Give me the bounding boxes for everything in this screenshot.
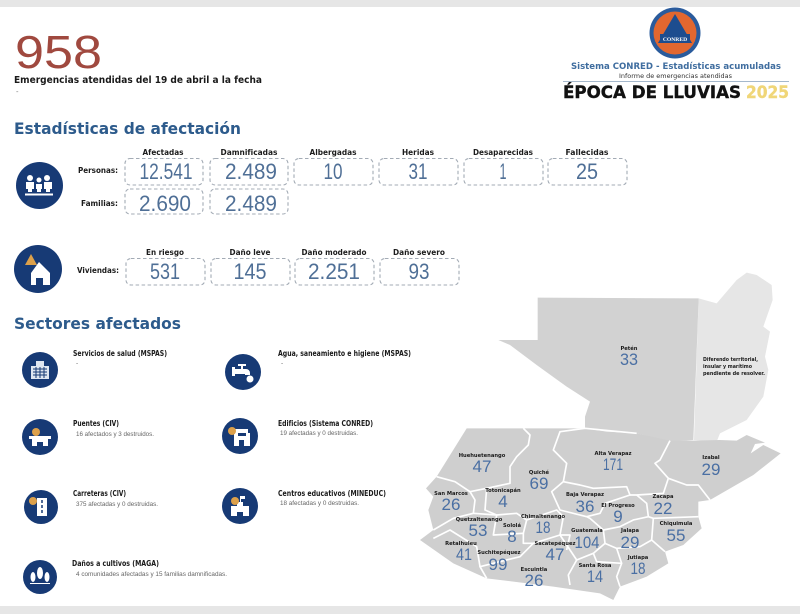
icon: hospital xyxy=(22,352,58,388)
sector: Agua: Agua, saneamiento e higiene (MSPAS) xyxy=(278,349,411,358)
stat: Damnificadas: 2.489 xyxy=(225,159,277,184)
icon: CONRED seal: CONRED xyxy=(663,37,687,43)
department: Alta Verapaz xyxy=(594,451,632,474)
department: Santa Rosa: 14 xyxy=(587,567,603,586)
department: Baja Verapaz: 36 xyxy=(576,497,594,516)
department: Alta Verapaz: Alta Verapaz xyxy=(594,451,632,457)
heading: Estadísticas de afectación: Estadísticas de afectación xyxy=(14,119,241,138)
stat: Albergadas: 10 xyxy=(324,159,342,184)
department: San Marcos: 26 xyxy=(442,495,460,514)
stat: Daño moderado xyxy=(295,248,374,285)
stat: Familias damnificadas: 2.489 xyxy=(225,191,277,216)
icon: crops xyxy=(23,560,57,594)
department: Guatemala: Guatemala xyxy=(571,528,603,534)
icon: building xyxy=(222,418,258,454)
department: Quiché: 69 xyxy=(530,474,548,493)
stat: Heridas: 31 xyxy=(408,159,428,184)
heading: Sectores afectados: Sectores afectados xyxy=(14,314,181,333)
stat: Desaparecidas: Desaparecidas xyxy=(473,148,533,157)
department: Retalhuleu: Retalhuleu xyxy=(445,541,477,547)
stat: Familias afectadas xyxy=(125,189,203,216)
sector: Centros educativos: 18 afectadas y 0 destruidas. xyxy=(280,500,359,507)
department: Jutiapa xyxy=(627,555,649,578)
department: Zacapa: Zacapa xyxy=(652,494,674,500)
department: Petén: 33 xyxy=(620,350,638,369)
department: Sacatepéquez: 47 xyxy=(546,545,564,564)
stat: Fallecidas: Fallecidas xyxy=(566,148,609,157)
department: Escuintla: Escuintla xyxy=(521,567,548,573)
note: Diferendo territorial xyxy=(703,357,765,377)
stat: Albergadas: Albergadas xyxy=(310,148,357,157)
icon: CONRED seal xyxy=(650,8,700,58)
stat: Daño severo xyxy=(380,248,459,285)
department: Suchitepéquez: Suchitepéquez xyxy=(477,549,521,556)
headline number: 958 xyxy=(15,26,102,78)
department: Alta Verapaz: 171 xyxy=(603,455,623,474)
department: El Progreso: El Progreso xyxy=(601,503,635,509)
sector: Agua: - xyxy=(281,360,283,367)
logo block xyxy=(563,8,789,103)
sector: Puentes xyxy=(22,419,154,455)
sector: Puentes: 16 afectados y 3 destruidos. xyxy=(76,431,154,438)
department: El Progreso: 9 xyxy=(613,507,623,526)
department: Guatemala xyxy=(571,528,603,552)
map region: Petén and Belize xyxy=(498,273,773,442)
report subtitle: Informe de emergencias atendidas xyxy=(619,73,732,80)
map region: southern departments xyxy=(420,428,781,600)
stat: En riesgo xyxy=(126,248,205,285)
department: Sacatepéquez xyxy=(534,540,576,564)
note: Diferendo territorial: pendiente de resolver. xyxy=(703,371,765,377)
department: Escuintla xyxy=(521,567,548,590)
stat: Afectadas: Afectadas xyxy=(142,148,184,157)
department: Jalapa: 29 xyxy=(621,533,639,552)
sector: Agua xyxy=(225,349,411,390)
department: Retalhuleu: 41 xyxy=(456,545,472,564)
icon: bridge xyxy=(22,419,58,455)
icon: faucet xyxy=(225,354,261,390)
sector: Daños a cultivos: Daños a cultivos (MAGA) xyxy=(72,559,159,568)
department: San Marcos: San Marcos xyxy=(434,491,468,497)
department: Quetzaltenango: Quetzaltenango xyxy=(456,517,503,523)
stat: Daño moderado: Daño moderado xyxy=(302,248,367,257)
department: Quetzaltenango xyxy=(456,517,503,540)
stat: Afectadas xyxy=(125,148,203,185)
department: Totonicapán: 4 xyxy=(498,492,508,511)
department: Santa Rosa: Santa Rosa xyxy=(579,563,612,569)
department: Sololá xyxy=(503,522,521,546)
department: Retalhuleu xyxy=(445,541,477,564)
department: Zacapa xyxy=(652,494,674,518)
department: Chimaltenango xyxy=(521,514,565,537)
department: Suchitepéquez xyxy=(477,549,521,574)
system title: Sistema CONRED - Estadísticas acumuladas xyxy=(571,62,781,72)
season year: 2025 xyxy=(746,83,789,103)
icon: school xyxy=(222,488,258,524)
note: Diferendo territorial: Diferendo territorial, xyxy=(703,357,758,363)
row label: Viviendas: Viviendas: xyxy=(77,266,119,275)
stat: Daño leve: 145 xyxy=(234,259,266,284)
stat: Heridas: Heridas xyxy=(402,148,434,157)
stat: Daño leve xyxy=(211,248,290,285)
row label: Familias: Familias: xyxy=(81,199,118,208)
icon: people xyxy=(16,162,63,209)
stat: En riesgo: En riesgo xyxy=(146,248,184,257)
map of Guatemala xyxy=(420,273,781,600)
sector: Servicios de salud xyxy=(22,349,167,388)
stat: Daño moderado: 2.251 xyxy=(308,259,360,284)
department: Escuintla: 26 xyxy=(525,571,543,590)
sector: Puentes: Puentes (CIV) xyxy=(73,419,119,428)
stat: Heridas xyxy=(379,148,458,185)
department: Huehuetenango: 47 xyxy=(473,457,491,476)
sector: Carreteras: Carreteras (CIV) xyxy=(73,489,126,498)
department: Sacatepéquez: Sacatepéquez xyxy=(534,540,576,547)
sector: Centros educativos xyxy=(222,488,386,524)
stat: Fallecidas xyxy=(548,148,627,185)
icon: house warning xyxy=(14,245,62,293)
department: Jutiapa: 18 xyxy=(630,559,646,578)
department: Sololá: Sololá xyxy=(503,522,521,529)
department: Chiquimula xyxy=(660,521,693,545)
sector: Servicios de salud: Servicios de salud (MSPAS) xyxy=(73,349,167,358)
stat: Afectadas: 12.541 xyxy=(140,159,192,184)
stat: Desaparecidas xyxy=(464,148,543,185)
department: Quiché: Quiché xyxy=(529,469,550,476)
sector: Daños a cultivos xyxy=(23,559,227,594)
sector: Edificios xyxy=(222,418,373,454)
season title: ÉPOCA DE LLUVIAS xyxy=(563,81,741,103)
stat: En riesgo: 531 xyxy=(150,259,180,284)
department: Chimaltenango: Chimaltenango xyxy=(521,514,565,520)
department: El Progreso xyxy=(601,503,635,526)
department: Totonicapán: Totonicapán xyxy=(485,487,521,494)
department: Totonicapán xyxy=(485,487,521,511)
department: Chiquimula: Chiquimula xyxy=(660,521,693,527)
sector: Centros educativos: Centros educativos (MINEDUC) xyxy=(278,489,386,498)
stat: Damnificadas xyxy=(210,148,288,185)
row label: Personas: Personas: xyxy=(78,166,118,175)
department: Chiquimula: 55 xyxy=(667,526,685,545)
note: Diferendo territorial: insular y marítimo xyxy=(703,363,752,370)
department: Petén: Petén xyxy=(620,345,638,352)
department: Santa Rosa xyxy=(579,563,612,586)
department: Guatemala: 104 xyxy=(574,533,600,552)
sector: Edificios: 19 afectadas y 0 destruidas. xyxy=(280,430,358,437)
headline dash: - xyxy=(16,88,19,96)
stat: Daño severo: 93 xyxy=(408,259,430,284)
stat: Damnificadas: Damnificadas xyxy=(220,148,278,157)
department: Chimaltenango: 18 xyxy=(536,518,550,537)
sector: Servicios de salud: - xyxy=(76,360,78,367)
sector: Edificios: Edificios (Sistema CONRED) xyxy=(278,419,373,428)
stat: Albergadas xyxy=(294,148,373,185)
stat: Daño severo: Daño severo xyxy=(393,248,445,257)
department: Jutiapa: Jutiapa xyxy=(627,555,649,561)
sector: Carreteras xyxy=(24,489,158,524)
department: Izabal: 29 xyxy=(702,460,720,479)
sector: Carreteras: 375 afectadas y 0 destruidas. xyxy=(76,501,158,508)
sector: Daños a cultivos: 4 comunidades afectadas y 15 familias damnificadas. xyxy=(76,571,227,578)
department: Sololá: 8 xyxy=(507,527,517,546)
department: Baja Verapaz: Baja Verapaz xyxy=(566,492,604,498)
department: Izabal: Izabal xyxy=(702,455,720,461)
stat: Fallecidas: 25 xyxy=(576,159,598,184)
department: Huehuetenango: Huehuetenango xyxy=(459,453,506,459)
stat: Desaparecidas: 1 xyxy=(500,159,506,184)
department: San Marcos xyxy=(434,491,468,514)
department: Zacapa: 22 xyxy=(654,499,672,518)
department: Baja Verapaz xyxy=(566,492,604,516)
department: Suchitepéquez: 99 xyxy=(489,555,507,574)
headline description: Emergencias atendidas del 19 de abril a la fecha xyxy=(14,75,262,86)
stat: Familias damnificadas xyxy=(210,189,288,216)
department: Jalapa: Jalapa xyxy=(620,528,639,534)
stat: Familias afectadas: 2.690 xyxy=(139,191,191,216)
department: Quetzaltenango: 53 xyxy=(469,521,487,540)
department: Huehuetenango xyxy=(459,453,506,476)
icon: road xyxy=(24,490,58,524)
stat: Daño leve: Daño leve xyxy=(230,248,271,257)
